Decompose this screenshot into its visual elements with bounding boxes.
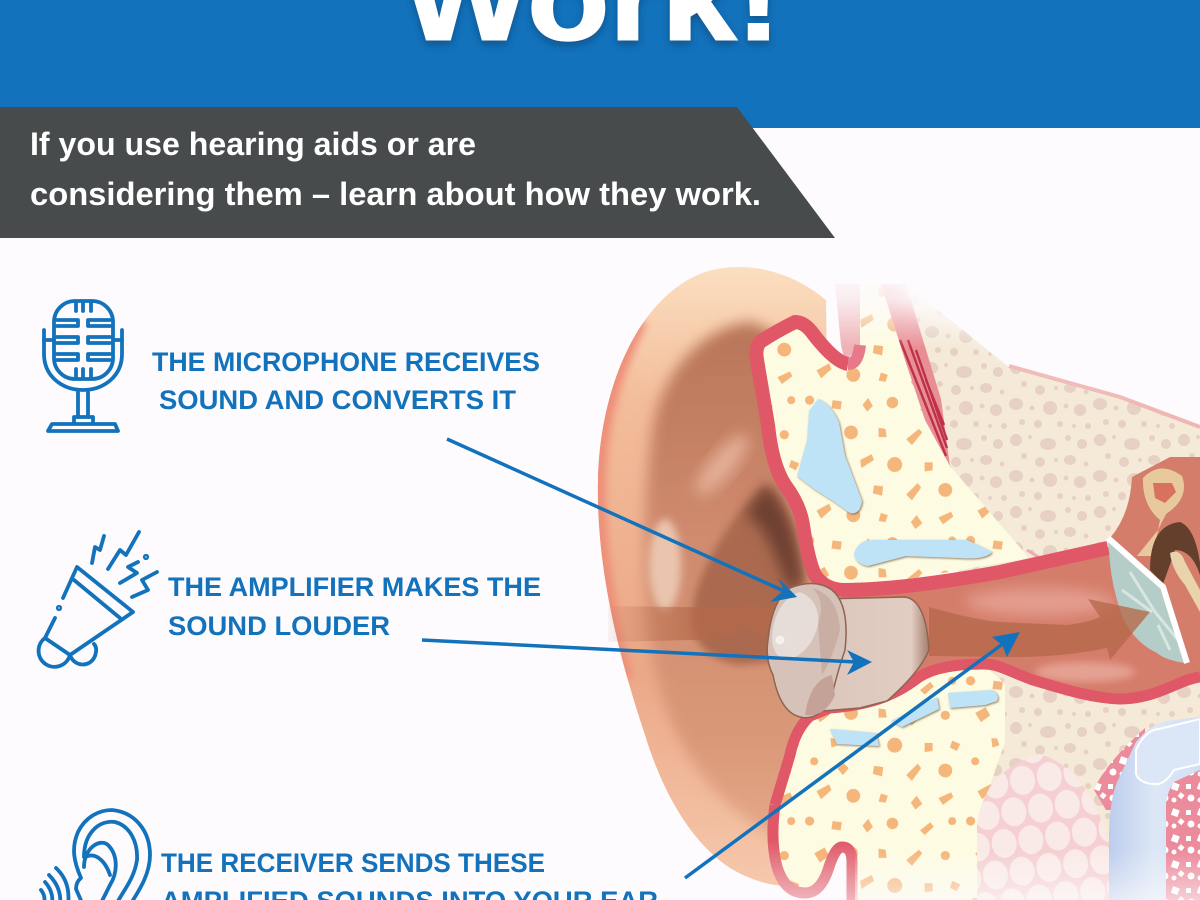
eardrum bbox=[1108, 538, 1187, 663]
blue cartilage patches bbox=[797, 399, 998, 746]
lower bone bbox=[773, 664, 1200, 900]
icon: microphone bbox=[44, 301, 122, 431]
text: microphone: THE MICROPHONE RECEIVES bbox=[152, 347, 540, 377]
outer ear bbox=[598, 267, 830, 886]
header banner bbox=[0, 0, 1200, 128]
subtitle text: If you use hearing aids or are bbox=[30, 126, 476, 162]
arrow: receiver bbox=[685, 632, 1020, 878]
muscle bbox=[881, 284, 950, 466]
inner ear cells bbox=[977, 754, 1110, 900]
fade overlay bbox=[832, 250, 1200, 395]
icon: ear with sound waves bbox=[41, 810, 150, 900]
canal skin outlines bbox=[756, 322, 1108, 590]
ear anatomy illustration bbox=[598, 267, 1200, 900]
subtitle text: considering them – learn about how they work. bbox=[30, 176, 761, 212]
icon: megaphone bbox=[39, 532, 157, 667]
text: amplifier: THE AMPLIFIER MAKES THE bbox=[168, 572, 541, 602]
cochlea bbox=[1094, 717, 1200, 900]
text: receiver: THE RECEIVER SENDS THESE bbox=[161, 848, 545, 878]
ossicles bbox=[1137, 468, 1200, 612]
bottom fade bbox=[855, 850, 1200, 900]
arrow: microphone bbox=[447, 439, 797, 602]
hearing aid bbox=[767, 583, 929, 718]
ear canal and middle ear chamber bbox=[839, 457, 1200, 694]
upper bone and skin outline bbox=[757, 284, 1029, 590]
text: microphone: SOUND AND CONVERTS IT bbox=[159, 385, 517, 415]
faded skull bone bbox=[906, 284, 1200, 900]
arrow: amplifier bbox=[422, 640, 872, 675]
text: amplifier: SOUND LOUDER bbox=[168, 611, 390, 641]
sound wave arrows bbox=[608, 599, 1150, 660]
subtitle banner bbox=[0, 107, 835, 238]
